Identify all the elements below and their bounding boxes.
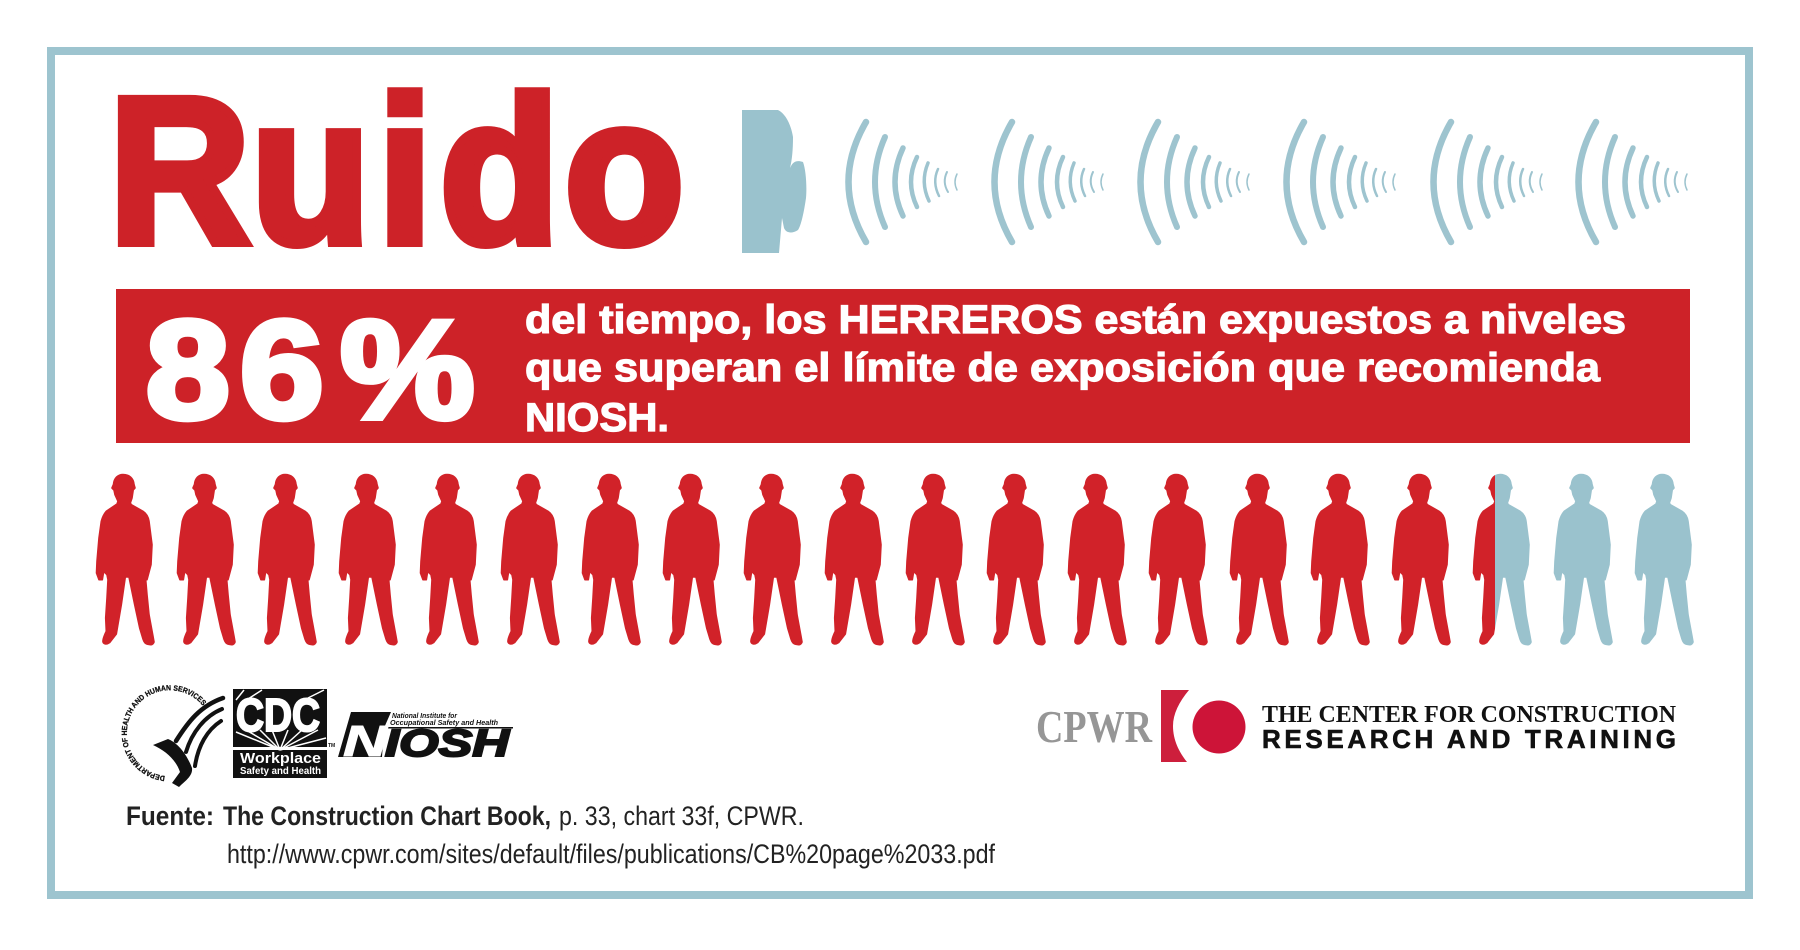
- icon: head profile: [742, 110, 806, 253]
- logo: CPWR: CPWR: [1036, 702, 1152, 752]
- logo: CPWR: [1036, 690, 1677, 762]
- icon: sound waves: [848, 122, 1687, 242]
- logo: NIOSH: National Institute for: [392, 713, 458, 720]
- source note: http://www.cpwr.com/sites/default/files/publications/CB%20page%2033.pdf: [227, 839, 995, 869]
- logo: HHS seal: [122, 685, 226, 787]
- logo: CDC: Workplace: [240, 750, 321, 767]
- logo: NIOSH: [338, 712, 513, 766]
- logo: HHS seal: DEPARTMENT OF HEALTH AND HUMAN SERVICES · USA: [122, 685, 206, 782]
- logo: NIOSH: IOSH: [385, 723, 511, 765]
- logo: CPWR: RESEARCH AND TRAINING: [1262, 724, 1676, 754]
- banner: [116, 289, 1690, 448]
- source note: The Construction Chart Book,: [223, 801, 551, 831]
- people row: 86%: [96, 474, 1693, 645]
- source note: Fuente:: [126, 801, 214, 831]
- banner text: del tiempo, los HERREROS están expuestos a niveles: [525, 298, 1626, 342]
- logo: CDC: [233, 689, 335, 778]
- banner text: que superan el límite de exposición que recomienda: [525, 346, 1601, 390]
- banner text: NIOSH.: [525, 396, 669, 440]
- source note: p. 33, chart 33f, CPWR.: [559, 801, 804, 831]
- logo: CDC: Safety and Health: [240, 766, 321, 777]
- logo: CDC: CDC: [236, 689, 320, 741]
- banner text: [525, 298, 1626, 440]
- logo: NIOSH: Occupational Safety and Health: [390, 720, 498, 727]
- logo: NIOSH: N: [343, 717, 389, 766]
- source note: [126, 801, 995, 869]
- title: Ruido: [109, 54, 684, 287]
- logo: CDC: TM: [328, 743, 335, 749]
- statistic 86%: 86%: [146, 291, 475, 448]
- logo: CPWR: THE CENTER FOR CONSTRUCTION: [1262, 702, 1677, 728]
